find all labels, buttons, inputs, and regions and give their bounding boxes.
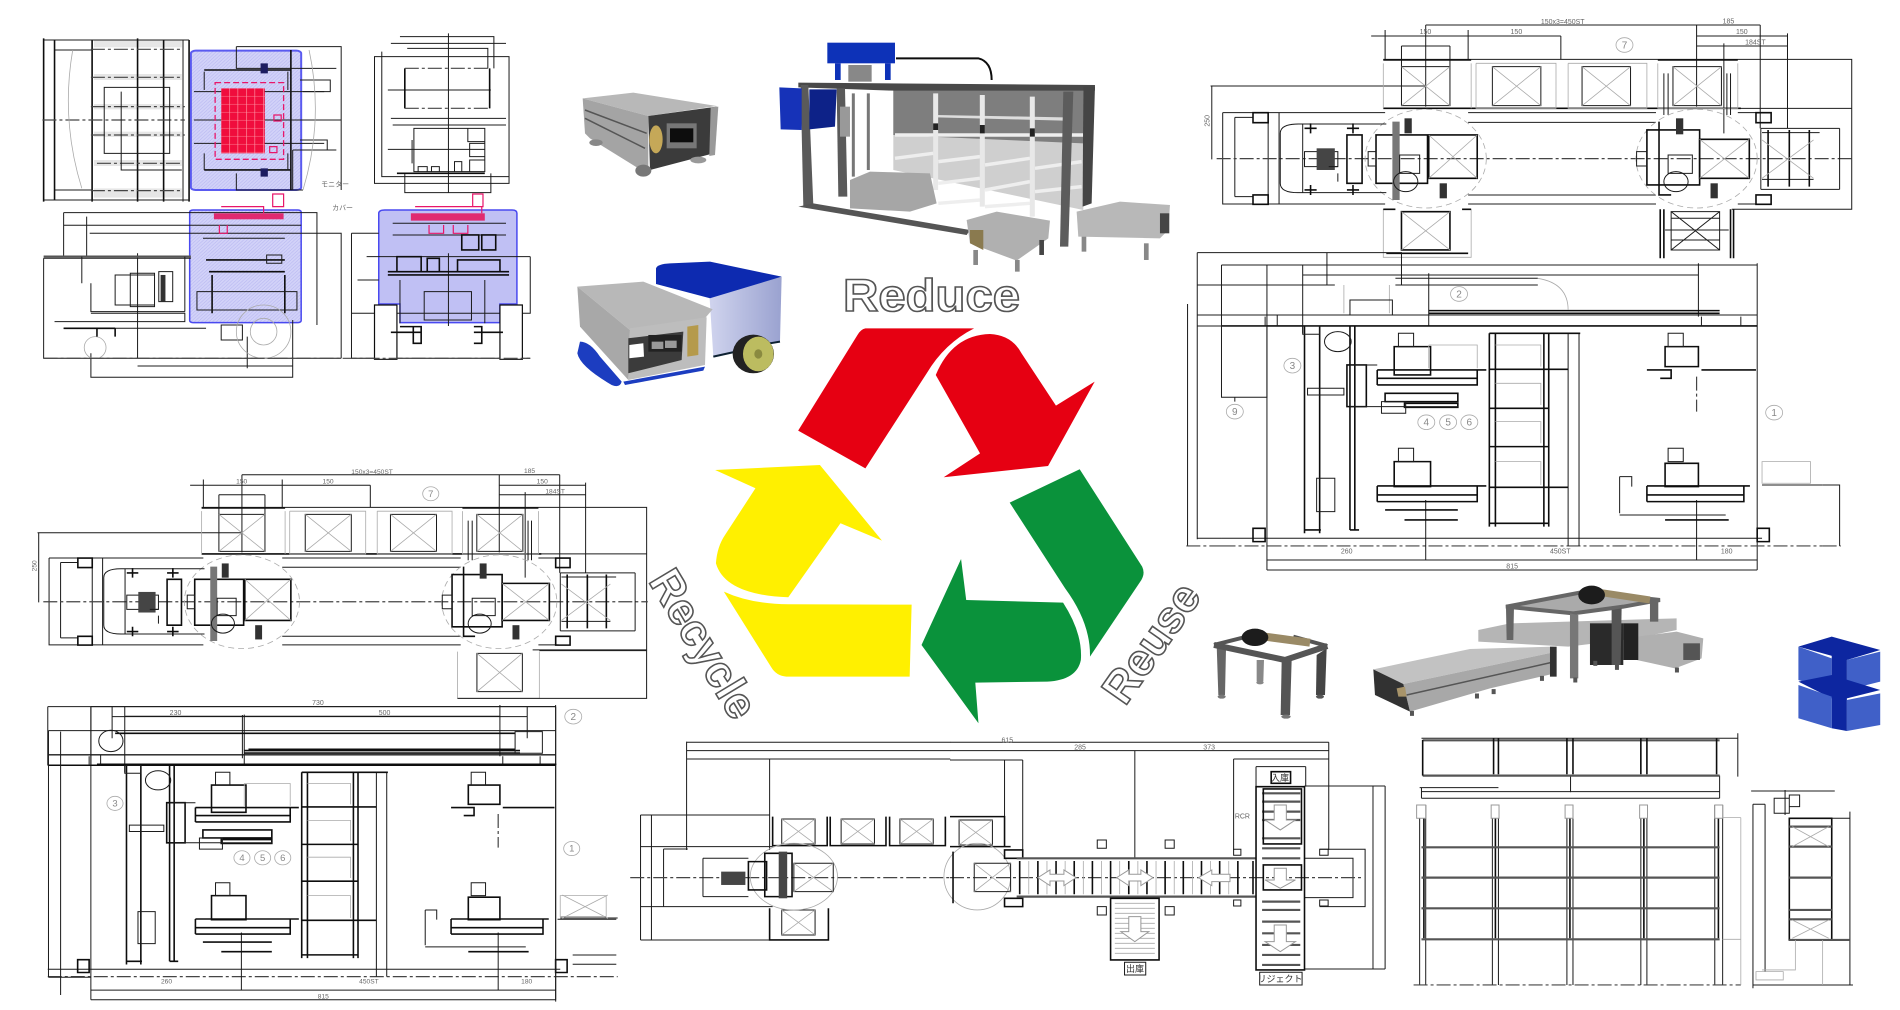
- horizontal roller conveyor: [1017, 858, 1256, 897]
- blue section panels: [190, 51, 517, 323]
- recycle symbol: [715, 328, 1144, 723]
- drawing: conveyor line layout, bottom center: [630, 737, 1385, 985]
- bottom-left side section view: [44, 194, 341, 377]
- drawing: station side elevation, top right: 9: [1232, 407, 1238, 418]
- drawing: vehicle orthographic views with blue sections: カバー: [332, 204, 353, 212]
- drawing: station side elevation, bottom left: 2: [570, 712, 576, 723]
- drawing: transfer system plan, middle left: [31, 468, 648, 698]
- drawing: conveyor line layout, bottom center: 373: [1203, 745, 1215, 752]
- drawing: station side elevation, top right: [1186, 253, 1841, 571]
- top-left plan view: [42, 38, 189, 202]
- 3D render: gantry stand: [1214, 629, 1327, 719]
- label: Reduce: Reduce: [843, 270, 1020, 321]
- bottom-right rear section view: [44, 194, 530, 359]
- drawing: rack front elevation: [1414, 733, 1741, 985]
- machine frame: [798, 83, 1095, 91]
- 3D render: conveyor with gantry assembly: [1373, 586, 1703, 713]
- 3D render: tower storage machine: [779, 43, 1170, 272]
- 3D render: mobile robot with blue top: [577, 262, 782, 386]
- drawing: station side elevation, bottom left: 230: [170, 710, 181, 717]
- branch conveyor: [1111, 898, 1159, 960]
- drawing: station side elevation, bottom left: 730: [312, 700, 324, 707]
- 3D render: blue storage cube: [1798, 637, 1880, 731]
- drawing: station side elevation, bottom left: 500: [379, 710, 391, 717]
- drawing: conveyor line layout, bottom center: 615: [1002, 737, 1013, 744]
- drawing: transfer system plan, top right: [1204, 18, 1853, 258]
- label: Reuse: Reuse: [1091, 573, 1211, 713]
- drawing: vehicle orthographic views with blue sections: モニター: [321, 180, 349, 189]
- vertical roller conveyor: [1256, 787, 1305, 970]
- label: 入庫: 入庫: [1271, 772, 1289, 783]
- shelf rack: [893, 89, 1083, 217]
- top section drawing over blue panel: [194, 47, 341, 190]
- label: 出庫: 出庫: [1126, 963, 1144, 974]
- label: Recycle: Recycle: [639, 560, 768, 728]
- drawing: conveyor line layout, bottom center: RCR: [1235, 813, 1250, 820]
- red arrow: reduce: [798, 328, 1095, 477]
- drawing: conveyor line layout, bottom center: 285: [1074, 745, 1086, 752]
- drawing: station side elevation, top right: 2: [1456, 289, 1462, 300]
- label: リジェクト: リジェクト: [1257, 974, 1303, 984]
- drawing: rack side elevation: [1751, 790, 1853, 988]
- drawing: station side elevation, bottom left: [48, 700, 618, 1002]
- yellow arrow: recycle: [715, 465, 912, 677]
- blue motor boxes: [779, 43, 992, 130]
- small conveyors: [967, 202, 1170, 272]
- 3D render: conveyor module: [583, 93, 718, 177]
- top-right end view: [375, 33, 509, 193]
- green arrow: reuse: [922, 469, 1144, 723]
- drawing: vehicle orthographic views with blue sections: [42, 33, 530, 377]
